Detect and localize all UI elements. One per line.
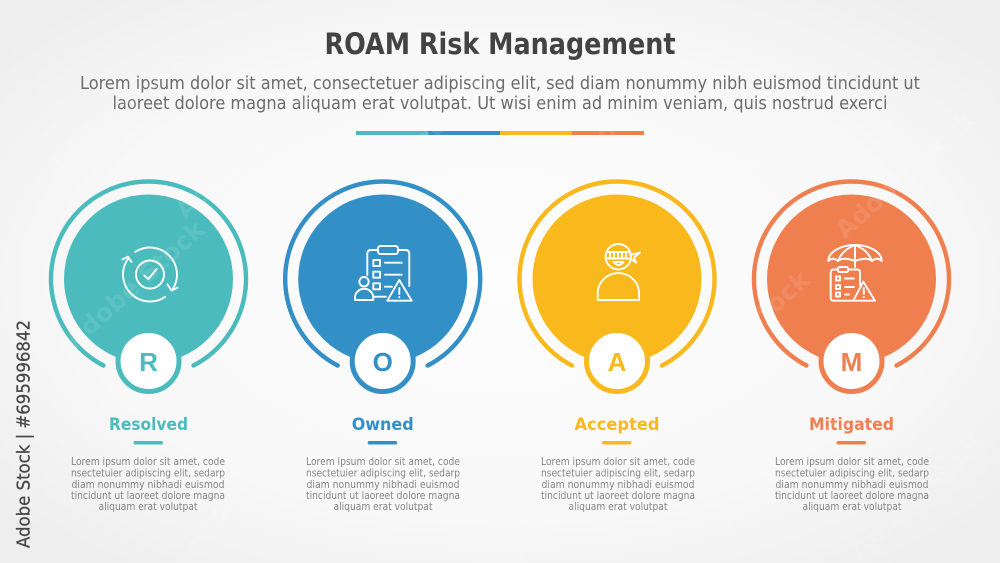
letter badge A: A (608, 347, 627, 377)
heading: Owned: Owned (352, 415, 414, 435)
stock image watermarks: Adobe Stock (495, 94, 646, 234)
subtitle text (80, 74, 920, 114)
description text: aliquam erat volutpat (98, 501, 198, 513)
stock image watermarks: Adobe Stock (375, 344, 526, 484)
stock image watermarks: Adobe Stock (175, 414, 326, 554)
outer ring (754, 182, 949, 366)
icon: person with bandana (598, 244, 640, 300)
description text (71, 456, 225, 513)
stock image watermarks: Adobe Stock (705, 59, 856, 199)
four-colour divider bar (356, 131, 644, 135)
description text: diam nonummy nibhadi euismod (72, 479, 224, 491)
filled circle (298, 194, 467, 364)
description text: nsectetuier adipiscing elit, sedarp (775, 468, 929, 480)
description text (541, 456, 695, 513)
filled circle (767, 194, 936, 364)
letter badge R (118, 330, 179, 392)
subtitle text: laoreet dolore magna aliquam erat volutpat. Ut wisi enim ad minim veniam, quis nostrud exerci (112, 94, 888, 114)
description text: Lorem ipsum dolor sit amet, code (71, 456, 225, 468)
accent underline (602, 441, 632, 444)
description text: diam nonummy nibhadi euismod (306, 479, 460, 491)
filled circle (64, 194, 233, 364)
heading: Mitigated: Mitigated (809, 415, 894, 435)
panel: Resolved (51, 182, 246, 513)
description text: tincidunt ut laoreet dolore magna (541, 490, 695, 502)
panel: Mitigated (754, 182, 949, 513)
description text: nsectetuier adipiscing elit, sedarp (306, 468, 460, 480)
icon: checklist, person and warning (355, 246, 412, 301)
description text: Lorem ipsum dolor sit amet, code (775, 456, 929, 468)
letter badge O: O (373, 347, 393, 377)
vertical stock credit: Adobe Stock | #695996842 (14, 320, 34, 548)
description text: aliquam erat volutpat (802, 501, 902, 513)
stock image watermarks: Adobe Stock (170, 84, 321, 224)
description text: tincidunt ut laoreet dolore magna (71, 490, 225, 502)
stock image watermarks: Adobe Stock (505, 424, 656, 563)
outer ring (520, 182, 715, 366)
stock image watermarks: Adobe Stock (830, 104, 981, 244)
description text (775, 456, 929, 513)
description text: nsectetuier adipiscing elit, sedarp (541, 468, 695, 480)
description text: diam nonummy nibhadi euismod (776, 479, 928, 491)
letter badge A (586, 330, 648, 392)
title: ROAM Risk Management (324, 27, 676, 61)
icon: rotating arrows with check (122, 248, 178, 301)
subtitle text: Lorem ipsum dolor sit amet, consectetuer adipiscing elit, sed diam nonummy nibh euismod tincidunt ut (80, 74, 920, 94)
outer ring (285, 182, 480, 366)
icon: umbrella over checklist and warning (828, 245, 882, 301)
description text: aliquam erat volutpat (568, 501, 668, 513)
letter badge R: R (139, 347, 158, 377)
description text: aliquam erat volutpat (334, 501, 432, 513)
description text: tincidunt ut laoreet dolore magna (306, 490, 460, 502)
stock image watermarks: Adobe Stock (40, 44, 191, 184)
filled circle (532, 194, 702, 364)
panel: Owned (285, 182, 480, 513)
stock image watermarks: Adobe Stock (845, 424, 996, 563)
accent underline (368, 441, 397, 444)
stock image watermarks: Adobe Stock (380, 39, 531, 179)
description text: diam nonummy nibhadi euismod (542, 479, 694, 491)
description text (306, 456, 460, 513)
outer ring (51, 182, 246, 366)
letter badge M (821, 330, 882, 392)
accent underline (836, 441, 866, 444)
description text: Lorem ipsum dolor sit amet, code (306, 456, 460, 468)
letter badge O (352, 330, 413, 392)
description text: nsectetuier adipiscing elit, sedarp (71, 468, 225, 480)
panel: Accepted (520, 182, 715, 513)
stock image watermarks: Adobe Stock (715, 394, 866, 534)
accent underline (134, 441, 163, 444)
heading: Resolved: Resolved (109, 415, 188, 435)
letter badge M: M (841, 347, 862, 377)
heading: Accepted: Accepted (574, 415, 660, 435)
description text: Lorem ipsum dolor sit amet, code (541, 456, 695, 468)
description text: tincidunt ut laoreet dolore magna (775, 490, 929, 502)
stock image watermarks: Adobe Stock (665, 264, 816, 404)
stock image watermarks: Adobe Stock (60, 214, 211, 354)
